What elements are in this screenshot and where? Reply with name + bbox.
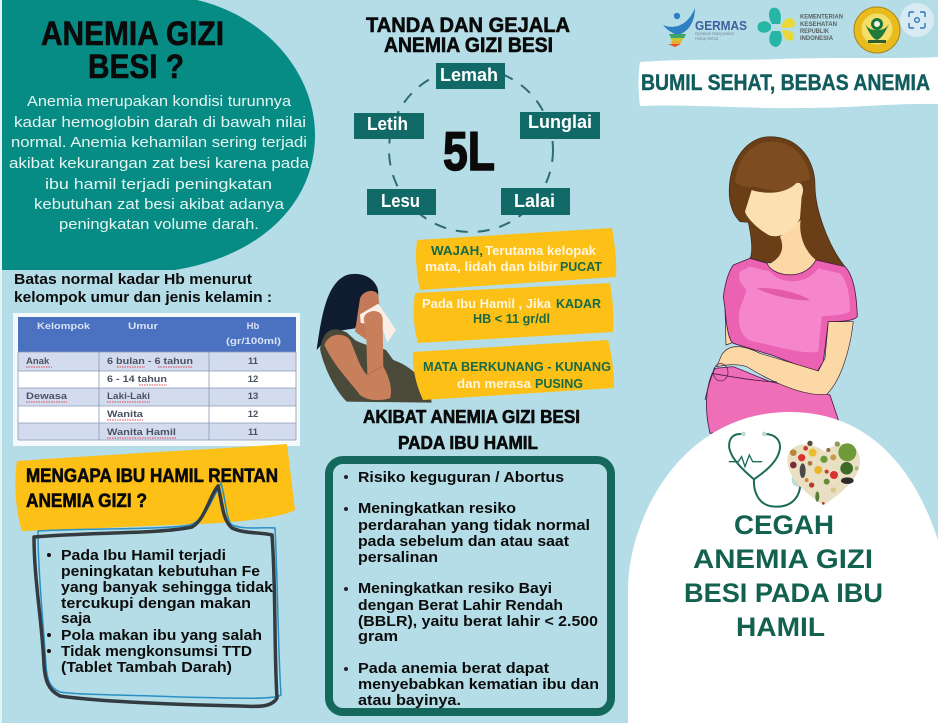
icon: heart of vegetables (787, 441, 860, 505)
label: Letih (354, 113, 424, 139)
panel: consequences list: Pada anemia berat dapat (358, 660, 549, 677)
table: normal Hb levels: (gr/100ml) (226, 336, 281, 347)
panel: prevention dome (628, 412, 938, 723)
bubble list: peningkatan kebutuhan Fe (61, 563, 260, 580)
prevention headline (684, 510, 883, 642)
definition text: kebutuhan zat besi akibat adanya (34, 196, 285, 213)
banner: Hb level: HB < 11 gr/dl (473, 311, 550, 326)
speech bubble outline (34, 483, 281, 706)
title: ANEMIA GIZI (41, 15, 224, 53)
panel: what is anemia (2, 0, 315, 270)
table: normal Hb levels: Kelompok (37, 321, 91, 332)
panel: consequences list: gram (358, 628, 398, 645)
logo: regional emblem (854, 7, 900, 53)
panel: why pregnant women are vulnerable (15, 444, 295, 706)
heading: consequences: PADA IBU HAMIL (398, 433, 538, 453)
banner: Hb level: KADAR (556, 296, 602, 311)
label: Lemah: Lemah (440, 65, 498, 85)
logo: Kementerian Kesehatan (758, 8, 843, 47)
table: normal Hb levels: Hb (247, 321, 260, 332)
table heading: kelompok umur dan jenis kelamin : (14, 289, 272, 306)
logo: GERMAS: GERMAS (695, 18, 747, 33)
label: Letih: Letih (367, 114, 408, 134)
definition text: akibat kekurangan zat besi karena pada (9, 155, 310, 172)
bubble list: Pada Ibu Hamil terjadi (61, 547, 226, 564)
panel: consequences list (329, 460, 611, 712)
logo: Kementerian Kesehatan: KESEHATAN (800, 21, 838, 28)
banner: face (416, 228, 616, 290)
table: normal Hb levels: 13 (248, 391, 258, 402)
slogan banner (638, 57, 938, 108)
label: Lesu (367, 189, 436, 215)
logo: GERMAS (663, 8, 747, 47)
definition text: Anemia merupakan kondisi turunnya (27, 93, 292, 110)
banner: eyes: MATA BERKUNANG - KUNANG (423, 359, 611, 374)
table: normal Hb levels: Wanita (107, 409, 144, 420)
panel: consequences list: atau bayinya. (358, 692, 461, 709)
logo: GERMAS: Gerakan Masyarakat (695, 31, 735, 36)
banner: face: Terutama kelopak (485, 243, 597, 258)
center label 5L: 5L (443, 120, 495, 182)
banner: face: mata, lidah dan bibir (425, 259, 558, 274)
table: normal Hb levels (13, 313, 300, 446)
table: normal Hb levels: 6 - 14 tahun (107, 374, 167, 385)
icon: stethoscope (729, 433, 805, 507)
logo: GERMAS: Hidup Sehat (695, 36, 719, 41)
heading: signs and symptoms: ANEMIA GIZI BESI (384, 34, 553, 57)
bubble list: (Tablet Tambah Darah) (61, 659, 232, 676)
illustration: pregnant woman (705, 137, 857, 433)
panel: consequences list: Meningkatkan resiko (358, 500, 516, 517)
banner: eyes (413, 340, 614, 400)
banner: face: PUCAT (560, 259, 602, 274)
heading: signs and symptoms (366, 14, 570, 57)
bubble list: Pola makan ibu yang salah (61, 627, 262, 644)
panel: consequences list: dengan Berat Lahir Rendah (358, 597, 563, 614)
definition text: ibu hamil terjadi peningkatan (45, 176, 272, 193)
banner: face: WAJAH, (431, 243, 483, 258)
heading: signs and symptoms: TANDA DAN GEJALA (366, 14, 570, 37)
definition text: normal. Anemia kehamilan sering terjadi (11, 134, 307, 151)
heading: consequences (363, 407, 580, 453)
banner: Hb level: Pada Ibu Hamil , Jika (422, 296, 552, 311)
table: normal Hb levels: Umur (128, 321, 158, 332)
label: Lemah (436, 63, 505, 89)
panel: consequences list: pada sebelum dan atau saat (358, 533, 569, 550)
logo: Kementerian Kesehatan: REPUBLIK (800, 28, 829, 35)
title: BESI ? (88, 48, 184, 86)
banner: eyes: PUSING (535, 376, 583, 391)
icon: image search button (900, 3, 934, 37)
logo: Kementerian Kesehatan: KEMENTERIAN (800, 14, 843, 20)
bubble list: yang banyak sehingga tidak (61, 579, 274, 596)
prevention headline: ANEMIA GIZI (693, 544, 873, 574)
table heading (14, 271, 272, 306)
table: normal Hb levels: 6 bulan - 6 tahun (107, 356, 193, 367)
table: normal Hb levels: 11 (248, 427, 259, 438)
table: normal Hb levels: 12 (248, 374, 258, 385)
heading banner (15, 444, 295, 531)
definition text: peningkatan volume darah. (59, 216, 259, 233)
title (41, 15, 224, 86)
panel: consequences list: persalinan (358, 549, 438, 566)
label: Lalai: Lalai (514, 191, 555, 211)
prevention headline: CEGAH (734, 510, 834, 540)
heading: consequences: AKIBAT ANEMIA GIZI BESI (363, 407, 580, 427)
bubble list: tercukupi dengan makan (61, 595, 251, 612)
prevention headline: BESI PADA IBU (684, 578, 883, 608)
panel: consequences list: perdarahan yang tidak normal (358, 517, 590, 534)
table: normal Hb levels: 12 (248, 409, 258, 420)
bubble list: saja (61, 610, 92, 627)
diagram: 5L cycle (354, 63, 600, 232)
table heading: Batas normal kadar Hb menurut (14, 271, 252, 288)
definition text: kadar hemoglobin darah di bawah nilai (14, 114, 306, 131)
table: normal Hb levels: Laki-Laki (107, 391, 150, 402)
label: Lesu: Lesu (381, 191, 420, 211)
illustration: sick pregnant woman (317, 274, 432, 403)
label: Lunglai (520, 112, 600, 139)
table: normal Hb levels: 11 (248, 356, 259, 367)
heading banner: MENGAPA IBU HAMIL RENTAN (26, 466, 278, 487)
panel: consequences list: menyebabkan kematian ibu dan (358, 676, 599, 693)
label: Lalai (501, 188, 570, 215)
panel: consequences list: Meningkatkan resiko Bayi (358, 580, 552, 597)
definition text (9, 93, 310, 233)
label: Lunglai: Lunglai (528, 112, 592, 132)
logo: Kementerian Kesehatan: INDONESIA (800, 35, 833, 42)
bubble list: Tidak mengkonsumsi TTD (61, 643, 252, 660)
panel: consequences list: Risiko keguguran / Abortus (358, 469, 564, 486)
heading banner: ANEMIA GIZI ? (26, 491, 147, 512)
banner: Hb level (414, 283, 613, 343)
table: normal Hb levels: Wanita Hamil (107, 427, 176, 438)
table: normal Hb levels: Dewasa (26, 391, 68, 402)
panel: consequences list: (BBLR), yaitu berat lahir < 2.500 (358, 613, 598, 630)
banner: eyes: dan merasa (457, 376, 532, 391)
panel: symptom banners (413, 228, 616, 400)
table: normal Hb levels: Anak (26, 356, 50, 367)
prevention headline: HAMIL (736, 612, 825, 642)
bubble list (47, 547, 274, 676)
